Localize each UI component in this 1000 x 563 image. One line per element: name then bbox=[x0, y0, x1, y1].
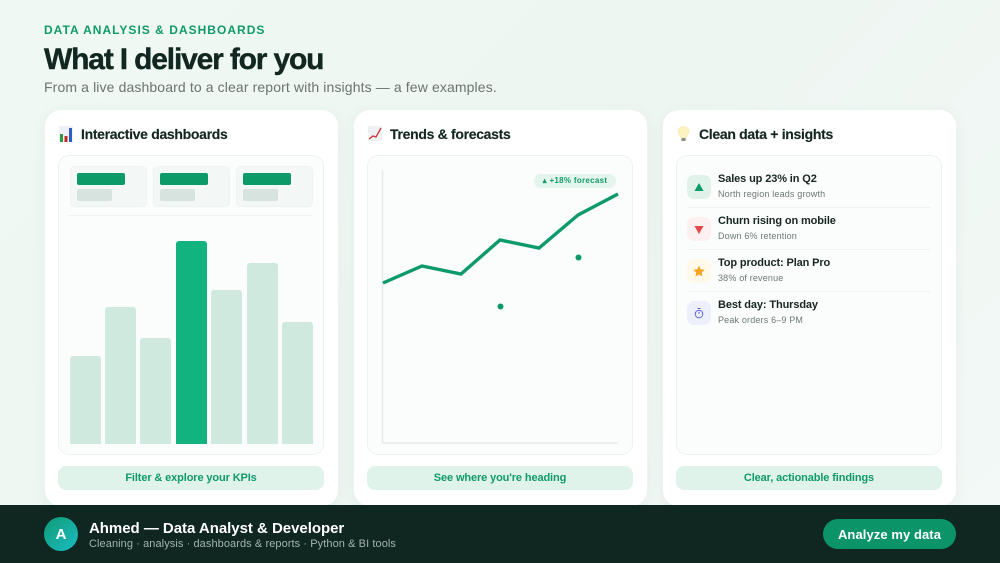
footer bar bbox=[0, 505, 1000, 563]
panel: trends and forecasts bbox=[354, 110, 647, 506]
dashboard mock panel bbox=[58, 155, 324, 455]
icon: bar chart emoji bbox=[59, 126, 73, 142]
subtitle: From a live dashboard to a clear report with insights — a few examples. bbox=[44, 79, 497, 95]
insight detail: North region leads growth bbox=[718, 189, 825, 199]
heading: trends and forecasts: Trends & forecasts bbox=[390, 126, 510, 142]
caption pill: Filter & explore your KPIs bbox=[125, 472, 257, 484]
line chart bbox=[382, 170, 619, 444]
avatar: A bbox=[56, 526, 66, 543]
call to action button bbox=[823, 519, 956, 549]
insight title: Sales up 23% in Q2 bbox=[718, 173, 817, 185]
caption pill bbox=[58, 466, 324, 490]
insight title: Churn rising on mobile bbox=[718, 215, 836, 227]
insight detail: Down 6% retention bbox=[718, 231, 797, 241]
avatar bbox=[44, 517, 78, 551]
insight row: churn bbox=[687, 215, 836, 241]
bar chart bbox=[70, 241, 313, 444]
forecast badge bbox=[534, 174, 616, 188]
insight detail: 38% of revenue bbox=[718, 273, 783, 283]
title: What I deliver for you bbox=[44, 43, 323, 76]
caption pill: Clear, actionable findings bbox=[744, 472, 874, 484]
caption pill bbox=[676, 466, 942, 490]
presenter tagline: Cleaning · analysis · dashboards & reports · Python & BI tools bbox=[89, 538, 396, 550]
insight row: top product bbox=[687, 257, 830, 283]
presenter name: Ahmed — Data Analyst & Developer bbox=[89, 520, 344, 537]
icon: light bulb emoji bbox=[678, 126, 690, 141]
eyebrow heading: DATA ANALYSIS & DASHBOARDS bbox=[44, 23, 265, 37]
forecast badge: ▴ +18% forecast bbox=[543, 176, 607, 185]
insight title: Best day: Thursday bbox=[718, 299, 818, 311]
heading: interactive dashboards: Interactive dashboards bbox=[81, 126, 227, 142]
caption pill bbox=[367, 466, 633, 490]
panel: clean data and insights bbox=[663, 110, 956, 506]
panel: interactive dashboards bbox=[45, 110, 338, 506]
insight row: best day bbox=[687, 299, 818, 325]
KPI tile 2 bbox=[152, 166, 230, 207]
insight row: sales bbox=[687, 173, 825, 199]
caption pill: See where you're heading bbox=[434, 472, 566, 484]
insight title: Top product: Plan Pro bbox=[718, 257, 830, 269]
insights panel bbox=[676, 155, 942, 455]
KPI tile 1 bbox=[70, 166, 146, 207]
icon: star bbox=[687, 259, 711, 283]
insight detail: Peak orders 6–9 PM bbox=[718, 315, 803, 325]
call to action button: Analyze my data bbox=[838, 527, 941, 542]
icon: trend chart emoji bbox=[368, 126, 382, 141]
chart panel bbox=[367, 155, 633, 455]
heading: clean data and insights: Clean data + insights bbox=[699, 126, 833, 142]
icon: down triangle bbox=[687, 217, 711, 241]
icon: stopwatch bbox=[687, 301, 711, 325]
icon: up triangle bbox=[687, 175, 711, 199]
KPI tile 3 bbox=[236, 166, 312, 207]
